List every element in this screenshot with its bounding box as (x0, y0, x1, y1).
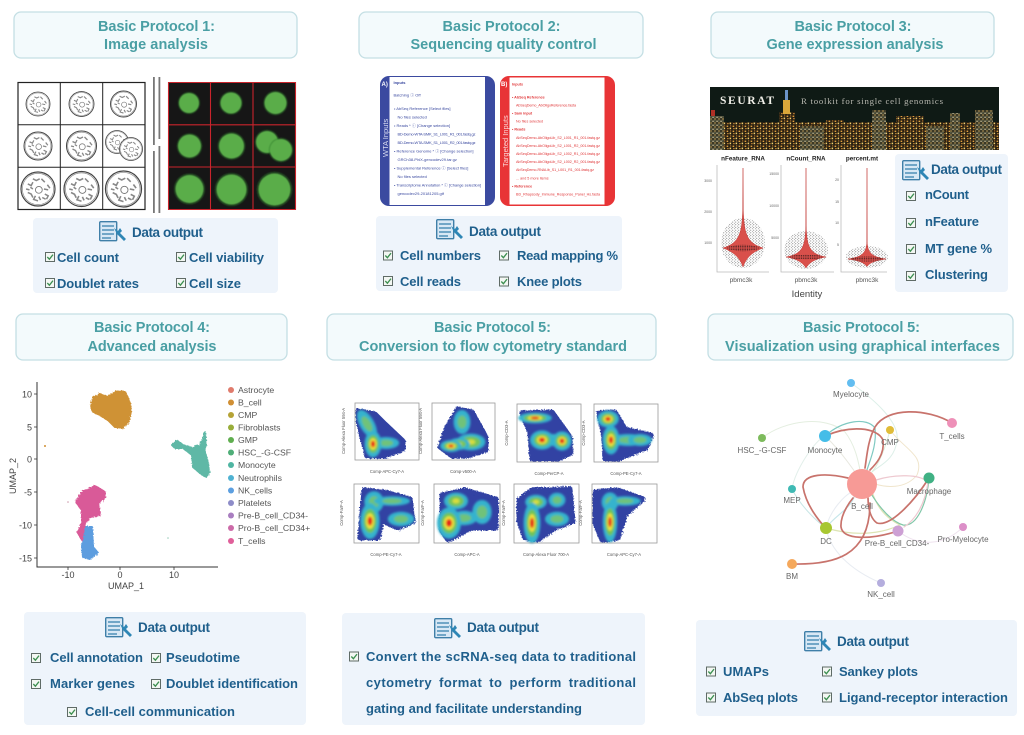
network graph (738, 379, 989, 599)
violin plot: nCount_RNA: 15000 (769, 172, 779, 176)
UMAP scatter plot: -5 (24, 488, 32, 498)
WTA inputs form: • Supplemental Reference ⓘ [Select files] (394, 164, 468, 170)
data output box 6: UMAPs (723, 664, 769, 679)
flow plot 4: Comp-PE-Cy7-A (610, 471, 642, 476)
heading: protocol 5 visualization: Visualization using graphical interfaces (725, 339, 1000, 355)
UMAP legend: Fibroblasts (238, 422, 281, 432)
data output box 2: Cell numbers (400, 248, 481, 263)
violin plot: nCount_RNA: nCount_RNA (786, 156, 826, 162)
label: data output: Data output (467, 620, 540, 635)
network labels: B_cell (851, 502, 873, 511)
data output box 4: Cell annotation (50, 650, 143, 665)
heading: protocol 3 (711, 12, 994, 58)
UMAP legend: Neutrophils (238, 473, 283, 483)
flow plot 5 (339, 484, 419, 557)
data output box 5 (342, 613, 645, 725)
UMAP legend: Pro-B_cell_CD34+ (238, 523, 310, 533)
flow plot 1 (341, 403, 419, 474)
Seurat banner (710, 87, 999, 150)
brightfield cell grid (18, 82, 145, 210)
UMAP scatter plot: 5 (27, 422, 32, 432)
WTA inputs form: BD-Demo-WTA-SMK_S1_L001_R2_001.fastq.gz (398, 140, 476, 145)
data output box 2: Read mapping % (517, 248, 618, 263)
WTA inputs form: No files selected (398, 114, 427, 120)
targeted inputs form: Targeted Inputs (501, 115, 510, 167)
flow plot 2 (418, 403, 495, 474)
violin plot: percent.mt: 5 (837, 243, 839, 247)
targeted inputs form: AbSeqDemo_AbOligoReference.fasta (516, 104, 577, 108)
icon: data output (805, 632, 831, 651)
targeted inputs form: • AbSeq Reference (512, 96, 545, 100)
WTA inputs form: • Reads * ⓘ [Change selection] (394, 122, 450, 128)
targeted inputs form: AbSeqDemo-AbOligoLib_S2_L001_R2_001.fastq.gz (516, 144, 600, 148)
network labels (738, 390, 989, 599)
strong edges (792, 412, 952, 564)
flow plot 2: Comp-v500-A (450, 469, 476, 474)
violin plot: nFeature_RNA: pbmc3k (730, 277, 753, 284)
data output box 3: MT gene % (925, 241, 992, 256)
UMAP scatter plot: 10 (22, 390, 32, 400)
violin plot: percent.mt: pbmc3k (856, 277, 879, 284)
network labels: DC (820, 537, 832, 546)
panel: Basic Protocol 5 conversion (327, 314, 658, 725)
coloured edges (825, 421, 929, 533)
panel: Basic Protocol 2 (359, 12, 643, 291)
description text: gating and facilitate understanding (366, 701, 582, 716)
violin plot: percent.mt: 10 (835, 221, 839, 225)
flow plot 8 (578, 484, 657, 557)
UMAP scatter plot: -15 (19, 554, 32, 564)
UMAP legend: Monocyte (238, 460, 276, 470)
WTA inputs form (380, 76, 495, 206)
WTA inputs form: • AbSeq Reference [Select files] (394, 106, 451, 111)
fluorescent cell grid (168, 82, 296, 210)
data output box 6: AbSeq plots (723, 690, 798, 705)
network labels: MEP (783, 496, 801, 505)
heading: protocol 4 (16, 314, 287, 360)
violin plot: nCount_RNA: 5000 (771, 236, 779, 240)
network labels: NK_cell (867, 590, 895, 599)
heading: protocol 3: Basic Protocol 3: (794, 19, 912, 35)
UMAP legend: T_cells (238, 536, 266, 546)
heading: protocol 4: Advanced analysis (88, 339, 216, 355)
icon: data output (437, 220, 463, 239)
flow plot 5: Comp-PE-Cy7-A (370, 552, 402, 557)
network labels: T_cells (939, 432, 965, 441)
data output box 2: Knee plots (517, 274, 582, 289)
data output box 6: Sankey plots (839, 664, 918, 679)
label: data output: Data output (469, 224, 542, 239)
flow plot 7: Comp-FarF-A (501, 500, 506, 526)
UMAP scatter plot: 0 (117, 570, 123, 580)
heading: protocol 5 visualization (708, 314, 1013, 360)
heading: protocol 4: Basic Protocol 4: (94, 320, 210, 336)
network labels: HSC_-G-CSF (738, 446, 787, 455)
Seurat banner: SEURAT (720, 95, 774, 107)
data output box 1: Doublet rates (57, 276, 139, 291)
heading: protocol 1 (14, 12, 297, 58)
panel: Basic Protocol 4 (8, 314, 310, 725)
panel: Basic Protocol 3 (704, 12, 1008, 300)
label: data output: Data output (931, 162, 1002, 177)
heading: protocol 5 conversion: Basic Protocol 5: (434, 320, 551, 336)
flow plot 7 (501, 484, 579, 557)
data output box 1 (33, 218, 278, 293)
targeted inputs form: AbSeqDemo-AbOligoLib_S2_L002_R1_001.fastq.gz (516, 152, 600, 156)
data output box 4: Doublet identification (166, 676, 298, 691)
icon: data output (435, 619, 461, 638)
WTA inputs form: A) (382, 82, 388, 88)
WTA inputs form: • Reference Genome * ⓘ [Change selection] (394, 148, 473, 154)
icon: data output (903, 161, 929, 180)
network labels: CMP (881, 438, 899, 447)
data output box 2: Cell reads (400, 274, 461, 289)
targeted inputs form: • Sam input (512, 112, 533, 116)
flow plot 4 (581, 404, 658, 476)
UMAP scatter plot: -10 (19, 520, 32, 530)
data output box 2 (376, 216, 622, 291)
flow plot 8: Comp-APC-Cy7-A (607, 552, 641, 557)
targeted inputs form: Inputs (512, 82, 523, 86)
UMAP legend: B_cell (238, 398, 262, 408)
WTA inputs form: No files selected (398, 174, 427, 179)
UMAP scatter plot: 0 (27, 454, 32, 464)
data output box 4: Marker genes (50, 676, 135, 691)
flow plot 6: Comp-FarF-A (420, 500, 425, 526)
targeted inputs form: No files selected (516, 120, 543, 124)
flow plot 1: Comp-APC-Cy7-A (370, 469, 404, 474)
network nodes (758, 379, 967, 587)
UMAP scatter plot: UMAP_2 (8, 458, 18, 494)
UMAP legend: GMP (238, 435, 258, 445)
targeted inputs form: • Reads (512, 128, 525, 132)
UMAP scatter plot: 10 (169, 570, 179, 580)
data output box 3: Clustering (925, 267, 988, 282)
UMAP legend: NK_cells (238, 486, 273, 496)
flow plot 6: Comp-APC-A (454, 552, 480, 557)
UMAP legend: HSC_-G-CSF (238, 448, 291, 458)
flow plot 8: Comp-FarF-A (578, 500, 583, 526)
heading: protocol 1: Basic Protocol 1: (98, 19, 215, 35)
panel: Basic Protocol 5 visualization (696, 314, 1017, 716)
data output box 4: Cell-cell communication (85, 704, 235, 719)
violin plot: nCount_RNA (769, 156, 834, 284)
data output box 4: Pseudotime (166, 650, 240, 665)
violin plot: nFeature_RNA: 3000 (704, 179, 712, 183)
UMAP legend: CMP (238, 410, 258, 420)
violin plot: percent.mt: 15 (835, 200, 839, 204)
targeted inputs form: BD_Rhapsody_Immune_Response_Panel_Hs.fasta (516, 192, 601, 196)
data output box 1: Cell size (189, 276, 241, 291)
heading: protocol 2 (359, 12, 643, 58)
UMAP legend: Pre-B_cell_CD34- (238, 510, 308, 520)
network labels: BM (786, 572, 798, 581)
targeted inputs form: AbSeqDemo-AbOligoLib_S2_L002_R2_001.fastq.gz (516, 160, 600, 164)
violin plot: percent.mt: 20 (835, 178, 839, 182)
description text (366, 649, 636, 716)
heading: protocol 5 conversion (327, 314, 656, 360)
heading: protocol 1: Image analysis (104, 37, 208, 53)
flow plot 3: Comp-PerCP-A (534, 471, 564, 476)
targeted inputs form (500, 76, 615, 206)
flow plot 3 (504, 404, 581, 476)
data output box 6 (696, 620, 1017, 716)
WTA inputs form: gencodev29-20181205.gtf (398, 191, 445, 196)
divider bars (153, 77, 160, 213)
icon: data output (100, 222, 126, 241)
network labels: Macrophage (907, 487, 952, 496)
description text: cytometry format to perform traditional (366, 675, 636, 690)
violin plot: percent.mt: percent.mt (846, 156, 879, 162)
data output box 3: nFeature (925, 214, 979, 229)
heading: protocol 2: Basic Protocol 2: (442, 19, 560, 35)
flow plot 1: Comp-Alexa Fluor 594-A (341, 408, 346, 454)
heading: protocol 5 visualization: Basic Protocol 5: (803, 320, 920, 336)
violin plot: nFeature_RNA: 1000 (704, 241, 712, 245)
network labels: Monocyte (808, 446, 843, 455)
data output box 4 (24, 612, 306, 725)
violin plot: percent.mt (835, 156, 888, 284)
flow plot 6 (420, 484, 500, 557)
WTA inputs form: GRCh38-PhiX-gencodev29.tar.gz (398, 157, 457, 162)
UMAP legend: Platelets (238, 498, 272, 508)
WTA inputs form: Batching ⓘ Off (394, 92, 421, 98)
description text: Convert the scRNA-seq data to traditional (366, 649, 636, 664)
UMAP scatter plot (8, 382, 218, 591)
network labels: Myelocyte (833, 390, 870, 399)
pale edges (762, 383, 963, 583)
UMAP legend: Astrocyte (238, 385, 274, 395)
panel: Basic Protocol 1 (14, 12, 297, 293)
network labels: Pro-Myelocyte (937, 535, 989, 544)
targeted inputs form: B) (501, 82, 507, 88)
heading: protocol 2: Sequencing quality control (410, 37, 596, 53)
violin plot: nCount_RNA: 10000 (769, 204, 779, 208)
network labels: Pre-B_cell_CD34- (865, 539, 930, 548)
heading: protocol 3: Gene expression analysis (766, 37, 944, 53)
WTA inputs form: • Transcriptome Annotation * ⓘ [Change selection] (394, 182, 481, 188)
UMAP scatter plot: -10 (61, 570, 75, 580)
data output box 3 (895, 154, 1008, 292)
targeted inputs form: AbSeqDemo-AbOligoLib_S2_L001_R1_001.fastq.gz (516, 136, 600, 140)
axis label: Identity: Identity (792, 289, 823, 300)
violin plot: nFeature_RNA (704, 156, 769, 284)
violin plot: nFeature_RNA: 2000 (704, 210, 712, 214)
label: data output: Data output (132, 225, 204, 240)
violin plot: nFeature_RNA: nFeature_RNA (721, 156, 765, 162)
WTA inputs form: BD-Demo-WTA-SMK_S1_L001_R1_001.fastq.gz (398, 132, 476, 136)
heading: protocol 5 conversion: Conversion to flow cytometry standard (359, 339, 627, 355)
label: data output: Data output (138, 620, 210, 635)
flow plot 7: Comp-Alexa Fluor 700-A (523, 552, 569, 557)
data output box 6: Ligand-receptor interaction (839, 690, 1008, 705)
UMAP scatter plot: UMAP_1 (108, 581, 144, 591)
flow plot 3: Comp-CD3-A (504, 420, 509, 446)
Seurat banner: R toolkit for single cell genomics (801, 96, 944, 106)
label: data output: Data output (837, 634, 910, 649)
violin plot: nCount_RNA: pbmc3k (795, 277, 818, 284)
flow plot 5: Comp-FarF-A (339, 500, 344, 526)
flow plot 2: Comp-Alexa Fluor 594-A (418, 408, 423, 454)
UMAP legend (228, 385, 310, 546)
targeted inputs form: AbSeqDemo-RNALib_S1_L001_R1_001.fastq.gz (516, 168, 594, 172)
WTA inputs form: Inputs (394, 80, 406, 85)
targeted inputs form: ... and 5 more items (516, 176, 549, 180)
icon: data output (106, 618, 132, 637)
data output box 1: Cell viability (189, 250, 265, 265)
flow plot 4: Comp-CD3-A (581, 420, 586, 446)
WTA inputs form: WTA Inputs (381, 119, 390, 157)
targeted inputs form: • Reference (512, 184, 532, 188)
data output box 1: Cell count (57, 250, 120, 265)
data output box 3: nCount (925, 187, 970, 202)
